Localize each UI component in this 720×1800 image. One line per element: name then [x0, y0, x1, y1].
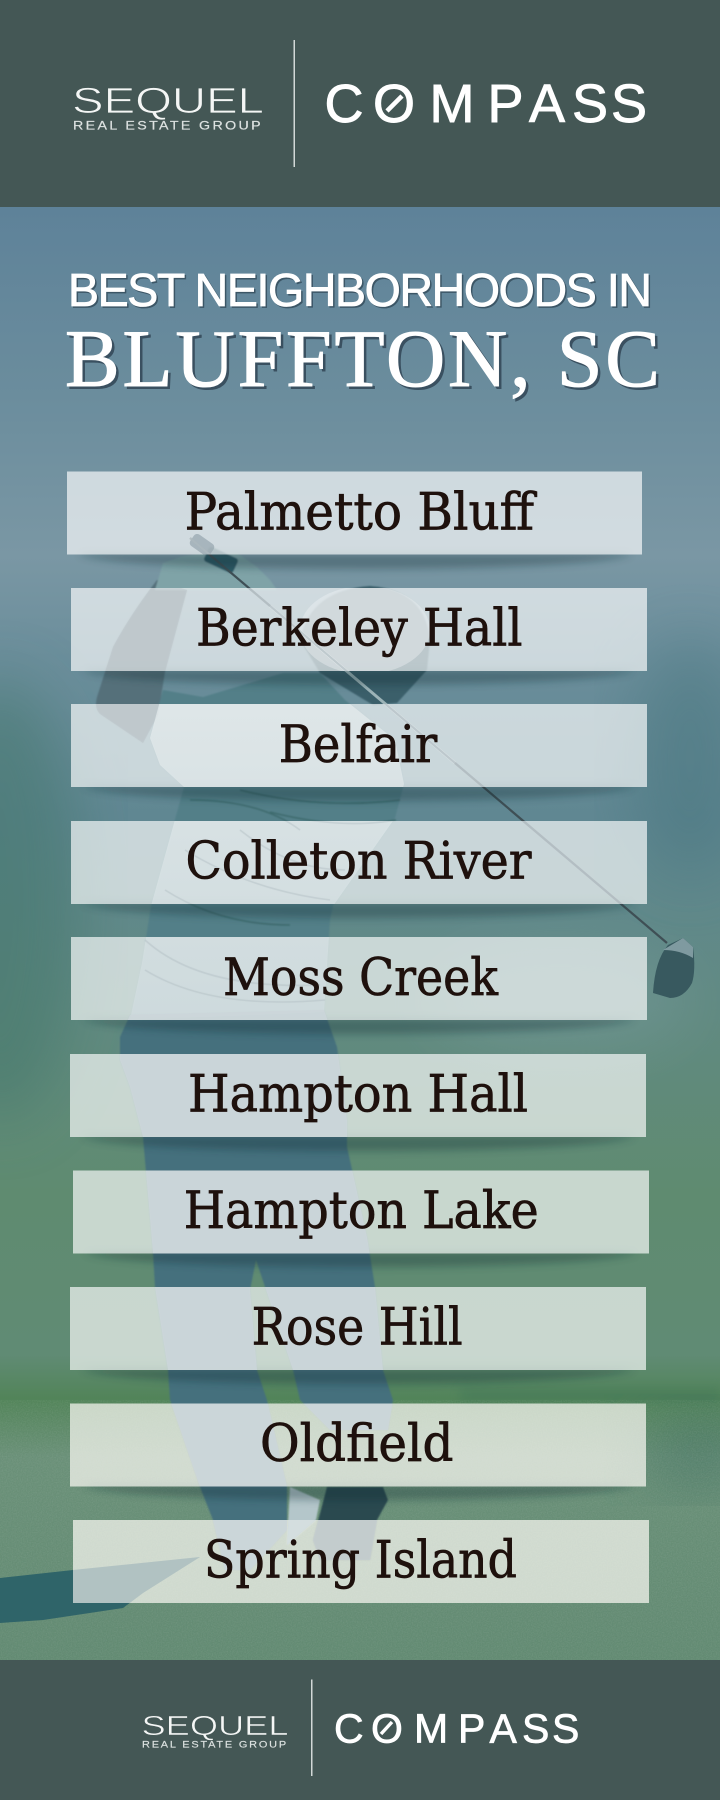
club shaft [190, 538, 667, 943]
tree blur right [630, 640, 720, 880]
neighborhood boxes background [67, 472, 649, 1603]
item: Hampton Hall: Hampton Hall [188, 1066, 528, 1124]
footer divider [311, 1680, 312, 1776]
logo: Compass: COMPASS [324, 74, 647, 134]
title line 1: BEST NEIGHBORHOODS IN [70, 266, 654, 318]
title [65, 264, 662, 406]
golfer seen through boxes [73, 534, 620, 1603]
item: Oldfield: Oldfield [260, 1415, 454, 1474]
title line 2: BLUFFTON, SC [65, 313, 660, 404]
golfer silhouette [96, 546, 430, 1570]
item: Hampton Lake: Hampton Lake [184, 1182, 539, 1241]
dark grass patch far right [640, 1415, 720, 1485]
logo divider [294, 40, 295, 167]
item: Berkeley Hall: Berkeley Hall [196, 600, 522, 658]
footer logo: Compass: COMPASS [334, 1706, 579, 1752]
footer logo: Sequel Real Estate Group: SEQUEL [142, 1710, 288, 1741]
footer logo: Sequel Real Estate Group: REAL ESTATE GROUP [142, 1740, 288, 1750]
tree blur left [0, 680, 80, 1120]
header band [0, 0, 720, 207]
logo: Sequel Real Estate Group: REAL ESTATE GROUP [73, 118, 263, 132]
dark grass edge right [460, 1388, 720, 1402]
item: Moss Creek: Moss Creek [223, 949, 499, 1008]
box shadows [78, 554, 638, 1500]
title line 2: BLUFFTON, SC [68, 316, 662, 406]
item: Rose Hill: Rose Hill [252, 1298, 463, 1358]
neighborhood list [184, 484, 539, 1590]
ground shadow [0, 1557, 200, 1623]
grass texture [0, 1400, 720, 1660]
footer logo: Sequel Real Estate Group [142, 1710, 288, 1750]
logo: Sequel Real Estate Group [72, 80, 264, 132]
item: Spring Island: Spring Island [204, 1532, 517, 1590]
golf club [190, 538, 694, 998]
club head [653, 938, 694, 998]
mist patch right [430, 950, 690, 1050]
logo: Sequel Real Estate Group: SEQUEL [72, 80, 264, 121]
footer band [0, 1660, 720, 1800]
item: Colleton River: Colleton River [186, 832, 532, 892]
item: Palmetto Bluff: Palmetto Bluff [185, 484, 538, 542]
item: Belfair: Belfair [279, 716, 438, 775]
title line 1: BEST NEIGHBORHOODS IN [68, 264, 652, 316]
